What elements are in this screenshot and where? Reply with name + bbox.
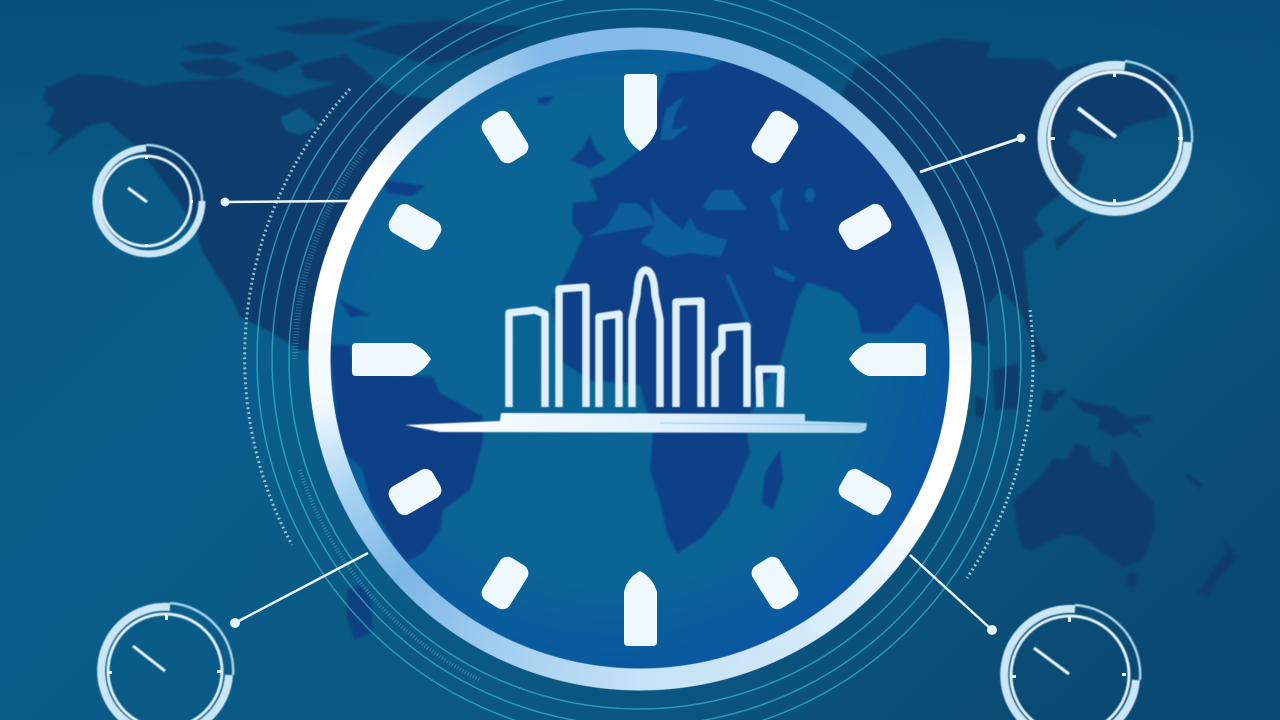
map: Baltic sea <box>660 95 690 140</box>
bottom-right clock hand <box>1034 648 1069 674</box>
connector: left clock <box>220 198 350 206</box>
top-right clock outer ring <box>1042 65 1188 211</box>
map: Southeast Asia islands <box>975 363 1065 420</box>
connector: top-right clock <box>920 134 1026 172</box>
skyline base platform <box>405 413 867 433</box>
marker: 12 <box>624 74 657 151</box>
bottom-right clock thin outer arc <box>1075 605 1140 680</box>
map: Tasmania <box>1126 573 1138 587</box>
connector: bottom-left clock <box>230 553 368 628</box>
marker: 9 <box>352 343 431 376</box>
left clock thin outer arc <box>146 145 202 201</box>
marker: 7 <box>478 553 532 613</box>
clock face <box>325 44 955 674</box>
bottom-right clock inner ring <box>1011 616 1129 720</box>
map: Persian Gulf <box>773 265 797 282</box>
marker: 8 <box>385 466 445 518</box>
map: Greenland <box>350 20 530 65</box>
building 6 <box>715 326 747 407</box>
bottom-right clock outer ring <box>1004 609 1136 720</box>
small clock: bottom-left <box>101 603 233 720</box>
building 2 <box>559 287 586 407</box>
bottom-left clock outer ring <box>101 607 229 720</box>
map: South America tip <box>347 585 372 640</box>
bottom-left clock thin outer arc <box>170 603 233 675</box>
marker: 10 <box>385 201 445 253</box>
marker: 2 <box>835 201 895 253</box>
map: Eurasia and Africa inside clock <box>552 40 1000 553</box>
map: Caspian Sea <box>770 187 790 230</box>
map: Eurasia <box>820 38 1177 362</box>
map: Arctic islands <box>178 18 385 85</box>
map: Australia <box>1013 443 1155 567</box>
left clock inner ring <box>101 156 191 246</box>
building 3 <box>599 314 619 407</box>
marker: 5 <box>748 553 802 613</box>
skyline base shadow line <box>660 423 860 425</box>
building 7 <box>759 369 781 407</box>
top-right clock thin outer arc <box>1125 61 1192 142</box>
small clock: top-right <box>1042 61 1192 211</box>
city skyline icon <box>405 270 867 433</box>
left clock hand <box>128 188 147 202</box>
map: Madagascar <box>762 450 783 510</box>
bottom-left clock inner ring <box>108 614 222 720</box>
top-right clock inner ring <box>1049 72 1181 204</box>
map: spots upper left <box>340 96 553 317</box>
map: Black Sea <box>703 190 747 210</box>
concentric technology rings <box>245 0 1033 720</box>
building 1 <box>509 310 545 407</box>
bottom-left clock hand <box>133 646 165 671</box>
top-right clock hand <box>1078 108 1116 137</box>
marker: 4 <box>835 466 895 518</box>
map: Mediterranean <box>587 197 728 257</box>
map: Aral Sea <box>805 188 815 202</box>
left clock outer ring <box>96 148 202 254</box>
small clock: bottom-right <box>1004 605 1140 720</box>
marker: 1 <box>748 107 802 167</box>
map: Japan and eastern coast <box>1055 213 1092 250</box>
clock rim <box>308 27 972 691</box>
map: Red Sea <box>725 275 753 328</box>
map: South America inside clock <box>330 345 483 562</box>
marker: 6 <box>624 571 657 646</box>
marker: 3 <box>849 343 926 376</box>
map: North America <box>43 74 440 350</box>
building 5 <box>676 301 701 407</box>
map inside clock <box>330 61 948 562</box>
map: Hudson Bay <box>280 108 320 135</box>
connector: bottom-right clock <box>910 555 997 635</box>
map: New Zealand <box>1198 540 1238 597</box>
main clock <box>330 50 950 668</box>
map: New Guinea <box>1070 397 1152 438</box>
hour markers <box>352 74 926 646</box>
map: United Kingdom <box>570 135 606 168</box>
small clock: left <box>96 145 202 254</box>
small clock tick marks <box>99 72 1183 678</box>
map: New Caledonia <box>1186 473 1203 489</box>
building 4: tower <box>632 270 660 407</box>
marker: 11 <box>478 107 532 167</box>
